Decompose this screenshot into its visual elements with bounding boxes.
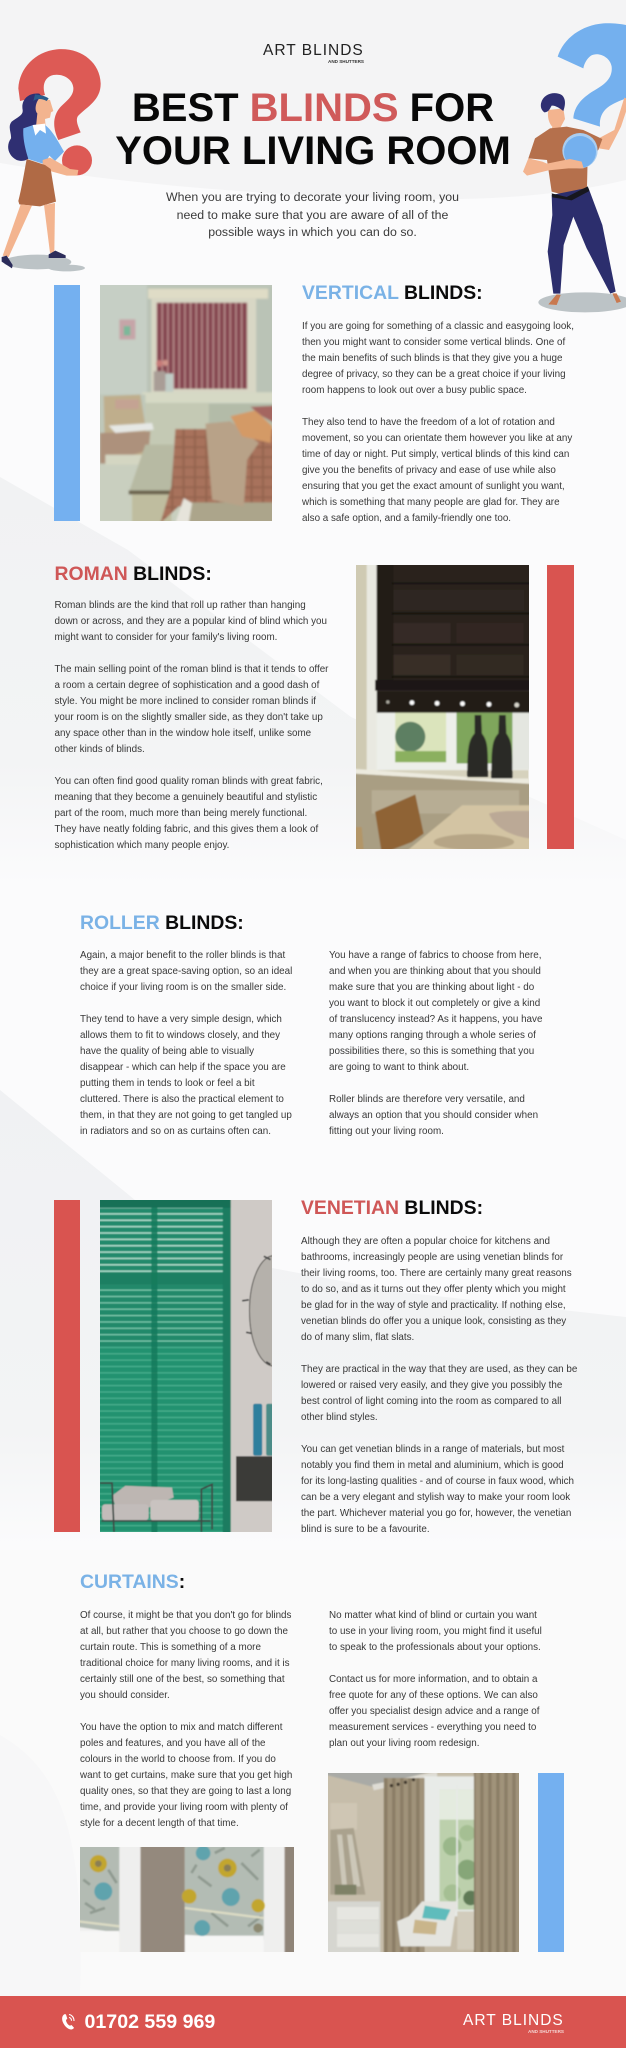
logo: footer: ART BLINDS: [463, 2012, 564, 2029]
logo: footer: AND SHUTTERS: [528, 2029, 564, 2034]
text: vertical blinds: which is something that many people are glad for. They are: [302, 497, 560, 508]
text: roller blinds, right column: Roller blinds are therefore very versatile, and: [329, 1094, 525, 1104]
text: venetian blinds: be glad for in the way of style and practicality. If nothing else,: [301, 1300, 566, 1311]
text: roller blinds, right column: many options ranging through a whole series of: [329, 1030, 536, 1040]
text: roman blinds: down or across, and they are a popular kind of blind which you: [54, 616, 327, 627]
text: roman blinds: sophistication which many people enjoy.: [54, 840, 229, 851]
text: vertical blinds: [302, 321, 574, 524]
text: roman blinds: They have neatly folding fabric, and this gives them a look of: [54, 824, 318, 835]
text: curtains, left column: colours in the world to choose from. If you do: [80, 1754, 276, 1765]
illustration: man with blue question mark: [523, 23, 626, 312]
text: venetian blinds: notably you find them in metal and aluminium, which is good: [301, 1460, 564, 1471]
title: YOUR LIVING ROOM: [115, 128, 511, 172]
text: curtains, left column: time, and provide your living room with plenty of: [80, 1802, 288, 1813]
text: roman blinds: your room is on the slightly smaller side, as they don't take up: [54, 712, 323, 723]
logo: Art Blinds: AND SHUTTERS: [328, 58, 364, 64]
text: vertical blinds: also a safe option, and a family-friendly one too.: [302, 513, 511, 524]
text: roller blinds, left column: allows them to fit to windows closely, and they: [80, 1030, 280, 1040]
accent bar: venetian section: [54, 1200, 80, 1532]
text: venetian blinds: to do so, and as it turns out they offer plenty which you might: [301, 1284, 566, 1295]
photo: vertical blinds: [100, 285, 272, 521]
text: roman blinds: [54, 600, 328, 851]
text: roller blinds, left column: have the quality of being able to visually: [80, 1046, 254, 1056]
text: curtains, left column: Of course, it might be that you don't go for blinds: [80, 1610, 291, 1621]
text: roller blinds, left column: them, in that they are not going to get tangled up: [80, 1110, 292, 1120]
text: venetian blinds: You can get venetian blinds in a range of materials, but most: [301, 1444, 564, 1455]
heading: roman blinds: ROMAN BLINDS:: [54, 563, 212, 585]
icon: phone: [62, 2014, 74, 2030]
accent bar: vertical section: [54, 285, 80, 521]
text: vertical blinds: room happens to look out over a busy public space.: [302, 385, 527, 396]
text: vertical blinds: time of day or night. Put simply, vertical blinds of this kind can: [302, 449, 569, 460]
text: roller blinds, right column: of translucency instead? As it happens, you have: [329, 1014, 542, 1024]
text: roller blinds, right column: you want to block it out completely or give a kind: [329, 998, 540, 1008]
text: curtains, right column: No matter what kind of blind or curtain you want: [329, 1610, 537, 1621]
heading: curtains: CURTAINS:: [80, 1571, 185, 1593]
text: venetian blinds: Although they are often a popular choice for kitchens and: [301, 1236, 550, 1247]
text: roman blinds: other kinds of blinds.: [54, 744, 145, 755]
text: vertical blinds: degree of privacy, so they can be a great choice if your living: [302, 369, 566, 380]
text: curtains, left column: [80, 1610, 292, 1829]
text: vertical blinds: the main benefits of such blinds is that they give you a huge: [302, 353, 562, 364]
text: vertical blinds: then you might want to consider some vertical blinds. One of: [302, 337, 565, 348]
text: venetian blinds: their living rooms, too. There are certainly many great reasons: [301, 1268, 572, 1279]
text: roman blinds: Roman blinds are the kind that roll up rather than hanging: [54, 600, 306, 611]
text: roller blinds, right column: [329, 950, 542, 1136]
text: roller blinds, left column: They tend to have a very simple design, which: [80, 1014, 282, 1024]
heading: roller blinds: ROLLER BLINDS:: [80, 912, 244, 934]
text: curtains, right column: plan out your living room redesign.: [329, 1738, 479, 1749]
text: curtains, right column: Contact us for more information, and to obtain a: [329, 1674, 537, 1685]
accent bar: roman section: [547, 565, 574, 849]
photo: venetian blinds: [100, 1200, 272, 1532]
text: curtains, right column: to use in your living room, you might find it useful: [329, 1626, 542, 1637]
heading: vertical blinds: VERTICAL BLINDS:: [302, 282, 483, 304]
text: curtains, left column: style for a decent length of that time.: [80, 1818, 239, 1829]
intro text: need to make sure that you are aware of all of the: [177, 208, 448, 222]
intro text: [166, 190, 459, 239]
text: roller blinds, left column: [80, 950, 292, 1136]
text: roller blinds, left column: in radiators and so on as curtains often can.: [80, 1126, 271, 1136]
text: vertical blinds: ensuring that you get the exact amount of sunlight you want,: [302, 481, 565, 492]
text: roller blinds, right column: You have a range of fabrics to choose from here,: [329, 950, 542, 960]
text: curtains, right column: [329, 1610, 542, 1749]
photo: roman blinds: [356, 565, 529, 849]
photo: curtains room: [328, 1773, 519, 1952]
text: roman blinds: part of the room, much more than being merely functional.: [54, 808, 307, 819]
text: curtains, right column: to speak to the professionals about your options.: [329, 1642, 541, 1653]
intro text: When you are trying to decorate your living room, you: [166, 190, 459, 204]
text: roller blinds, right column: are going to want to think about.: [329, 1062, 469, 1072]
text: vertical blinds: give you the benefits of privacy and ease of use while also: [302, 465, 556, 476]
intro text: possible ways in which you can do so.: [208, 225, 417, 239]
text: curtains, left column: certainly still one of the best, so something that: [80, 1674, 285, 1685]
text: roman blinds: a room a certain degree of sophistication and a good dash of: [54, 680, 319, 691]
text: vertical blinds: They also tend to have the freedom of a lot of rotation and: [302, 417, 555, 428]
text: curtains, left column: traditional choice for many living rooms, and it is: [80, 1658, 290, 1669]
text: curtains, right column: offer you specialist design advice and a range of: [329, 1706, 540, 1717]
text: venetian blinds: the part. Whichever material you go for, however, the venetian: [301, 1508, 571, 1519]
text: roman blinds: might want to consider for your family's living room.: [54, 632, 277, 643]
text: curtains, right column: free quote for any of these options. We can also: [329, 1690, 538, 1701]
text: roller blinds, left column: they are a great space-saving option, so an ideal: [80, 966, 292, 976]
text: curtains, right column: measurement services - everything you need to: [329, 1722, 536, 1733]
text: curtains, left column: poles and features, and you have all of the: [80, 1738, 266, 1749]
title: BEST BLINDS FOR: [132, 86, 494, 130]
text: roman blinds: meaning that they become a genuinely beautiful and stylistic: [54, 792, 317, 803]
text: roller blinds, right column: make sure that you are thinking about light - do: [329, 982, 534, 992]
text: curtains, left column: at all, but rather that you choose to go down the: [80, 1626, 288, 1637]
photo: floral roman blinds: [80, 1847, 294, 1952]
text: venetian blinds: for its long-lasting qualities - and of course in faux wood, which: [301, 1476, 574, 1487]
text: roller blinds, right column: possibilities there, so this is something that you: [329, 1046, 534, 1056]
footer band: [0, 1996, 626, 2048]
text: curtains, left column: quality ones, so that they are going to last a long: [80, 1786, 291, 1797]
text: venetian blinds: lowered or raised very easily, and they give you possibly the: [301, 1380, 562, 1391]
text: curtains, left column: want to get curtains, make sure that you get high: [80, 1770, 292, 1781]
text: venetian blinds: other blind styles.: [301, 1412, 378, 1423]
text: roman blinds: You can often find good quality roman blinds with great fabric,: [54, 776, 323, 787]
text: venetian blinds: They are practical in the way that they are used, as they can be: [301, 1364, 577, 1375]
text: venetian blinds: do of many slim, flat slats.: [301, 1332, 414, 1343]
text: roman blinds: style. You might be more inclined to consider roman blinds if: [54, 696, 316, 707]
illustration: woman with red question mark: [2, 49, 101, 272]
text: roman blinds: any space other than in the window hole itself, unlike some: [54, 728, 311, 739]
text: venetian blinds: blind is sure to be a favourite.: [301, 1524, 430, 1535]
text: roller blinds, left column: disappear - which can help if the space you are: [80, 1062, 286, 1072]
text: roller blinds, left column: choice if your living room is on the smaller side.: [80, 982, 286, 992]
text: venetian blinds: can be a very elegant and stylish way to make your room look: [301, 1492, 570, 1503]
text: roller blinds, left column: cluttered. There is also the practical element to: [80, 1094, 284, 1104]
text: roman blinds: The main selling point of the roman blind is that it tends to offer: [54, 664, 328, 675]
text: venetian blinds: venetian blinds do offer you a unique look, consisting as they: [301, 1316, 566, 1327]
text: venetian blinds: best control of light coming into the room as compared to all: [301, 1396, 561, 1407]
text: roller blinds, left column: putting them in tends to look or feel a bit: [80, 1078, 255, 1088]
text: roller blinds, right column: fitting out your living room.: [329, 1126, 444, 1136]
text: vertical blinds: movement, so you can orientate them however you like at any: [302, 433, 572, 444]
logo: Art Blinds: ART BLINDS: [263, 42, 364, 59]
text: venetian blinds: bathrooms, increasingly people are using venetian blinds for: [301, 1252, 563, 1263]
text: curtains, left column: You have the option to mix and match different: [80, 1722, 282, 1733]
text: venetian blinds: [301, 1236, 577, 1535]
phone number: 01702 559 969: [84, 2011, 215, 2033]
heading: venetian blinds: VENETIAN BLINDS:: [301, 1197, 483, 1219]
text: roller blinds, left column: Again, a major benefit to the roller blinds is that: [80, 950, 285, 960]
text: curtains, left column: you should consider.: [80, 1690, 170, 1701]
text: curtains, left column: curtain route. This is something of a more: [80, 1642, 261, 1653]
text: roller blinds, right column: and when you are thinking about that you should: [329, 966, 541, 976]
text: vertical blinds: If you are going for something of a classic and easygoing look,: [302, 321, 574, 332]
accent bar: curtains section: [538, 1773, 564, 1952]
title: [115, 86, 511, 172]
text: roller blinds, right column: always an option that you should consider when: [329, 1110, 538, 1120]
